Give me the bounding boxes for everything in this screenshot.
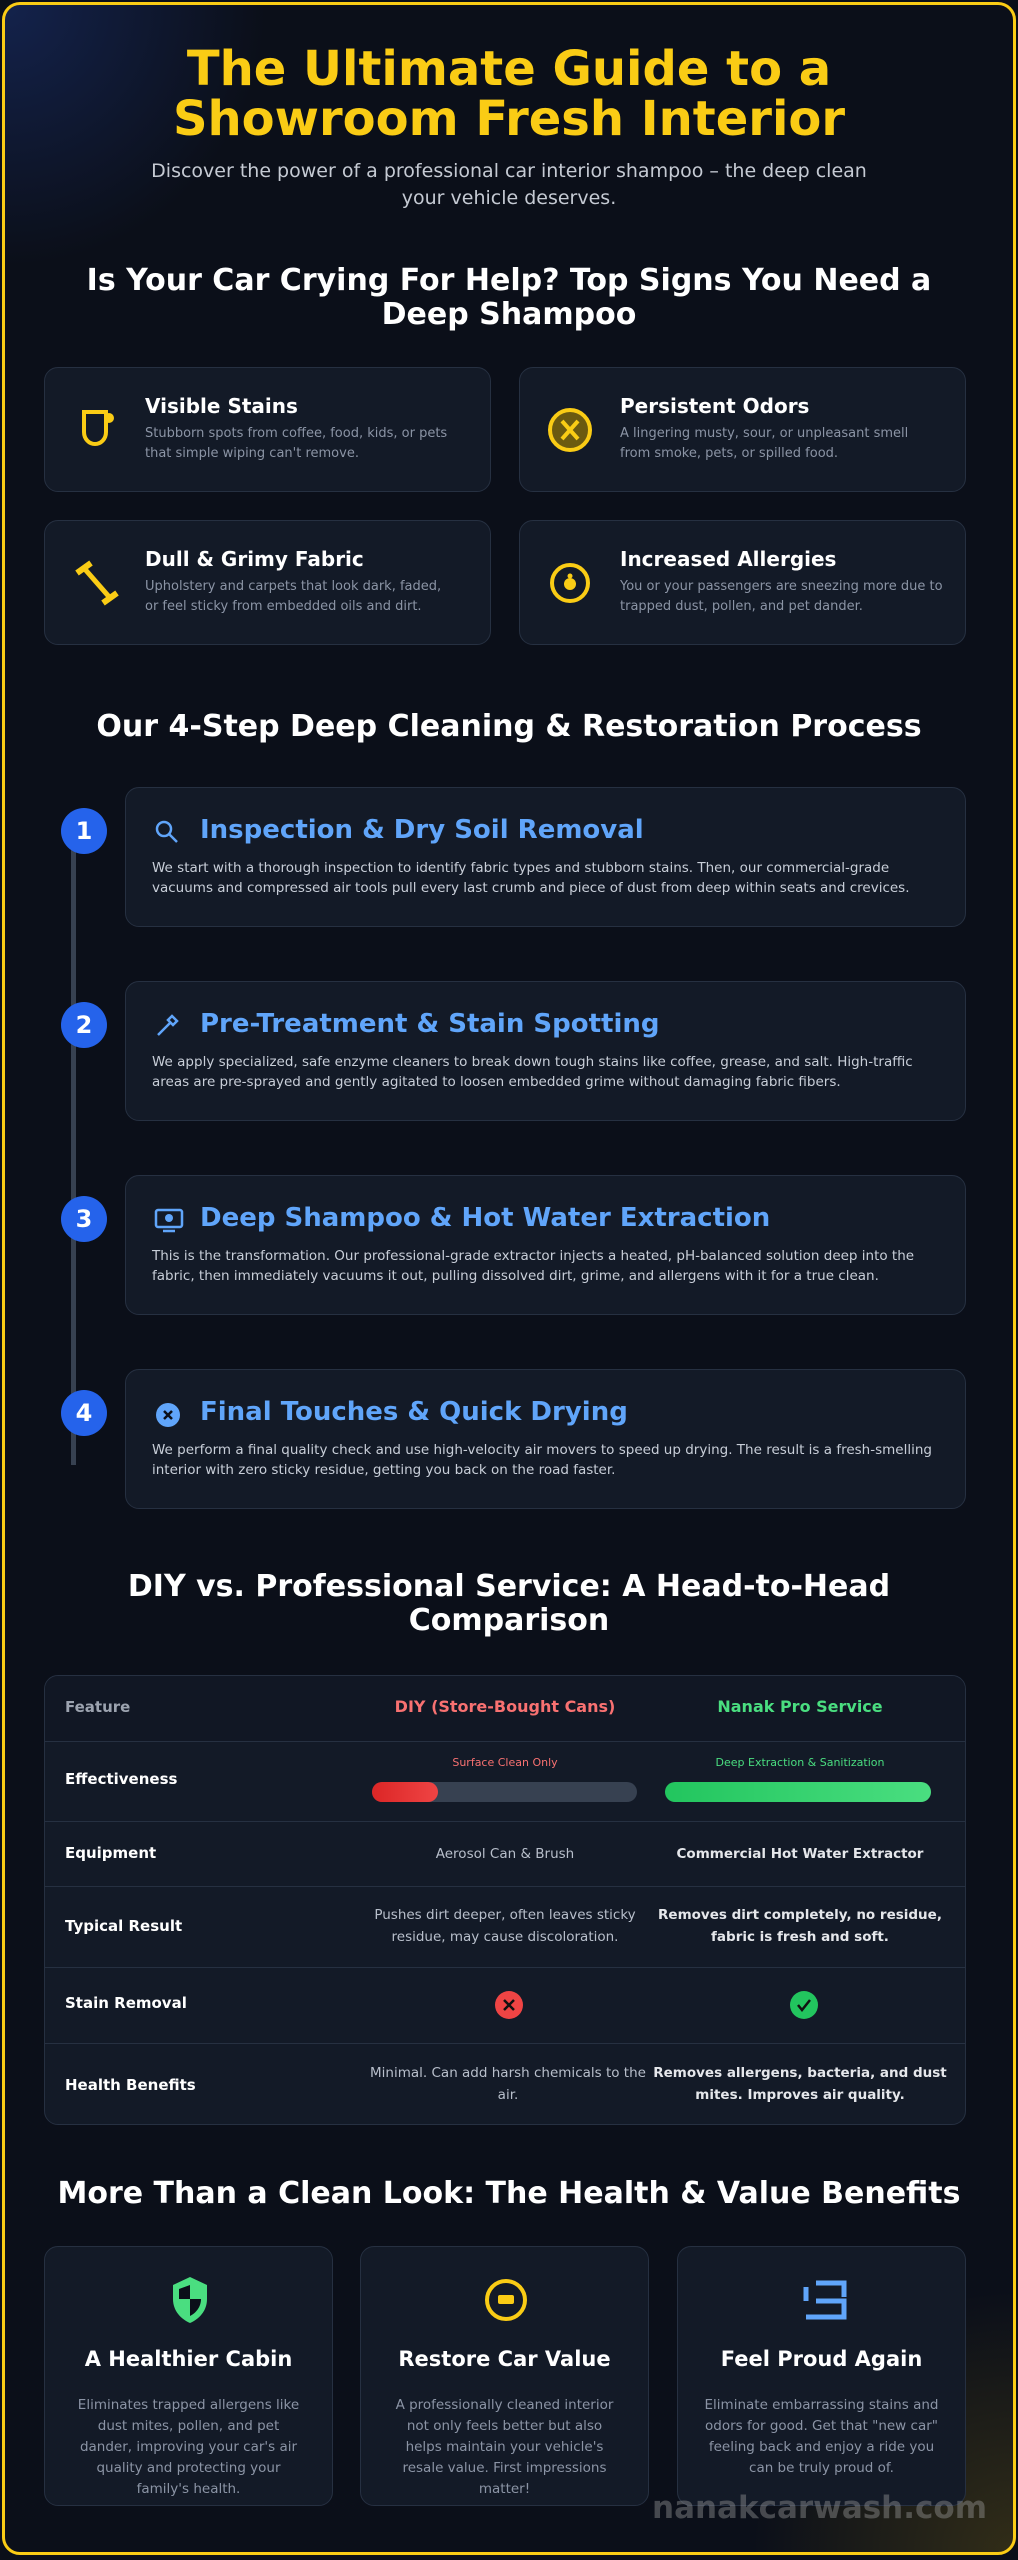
heading: comparison: DIY vs. Professional Service: A Head-to-Head Comparison [128, 1569, 890, 1638]
card: dull fabric [44, 520, 491, 645]
header row: Nanak Pro Service [717, 1697, 883, 1716]
step 4: We perform a final quality check and use high-velocity air movers to speed up drying. The result is a fresh-smelling interior with zero sticky residue, getting you back on the road faster. [152, 1442, 932, 1478]
row: effectiveness [45, 1741, 965, 1821]
row: health: Removes allergens, bacteria, and dust mites. Improves air quality. [653, 2065, 947, 2103]
number 3: 3 [76, 1205, 92, 1233]
watermark: nanakcarwash.com [652, 2490, 987, 2526]
header row: Feature [65, 1698, 130, 1716]
card: allergies: You or your passengers are sneezing more due to trapped dust, pollen, and pet dander. [620, 579, 943, 614]
step 2: We apply specialized, safe enzyme cleaners to break down tough stains like coffee, grease, and salt. High-traffic areas are pre-sprayed and gently agitated to loosen embedded grime without damaging fabric fibers. [152, 1054, 913, 1090]
icon: cup [82, 410, 114, 446]
benefit: car value: Restore Car Value [398, 2347, 611, 2371]
heading: benefits: More Than a Clean Look: The Health & Value Benefits [58, 2176, 960, 2211]
benefit: healthier cabin: A Healthier Cabin [85, 2347, 292, 2371]
step 3 [61, 1175, 966, 1315]
row: stain removal [45, 1967, 965, 2043]
card: odors [519, 367, 966, 492]
number 4 [61, 1390, 107, 1436]
card: visible stains [44, 367, 491, 492]
header row [45, 1676, 965, 1741]
comparison table [44, 1675, 966, 2125]
number 4: 4 [76, 1399, 92, 1427]
row: result: Removes dirt completely, no residue, fabric is fresh and soft. [658, 1907, 942, 1945]
benefit: proud: Feel Proud Again [721, 2347, 922, 2371]
icon: dumbbell [75, 560, 119, 606]
icon: shield [173, 2277, 207, 2323]
row: result: Typical Result [65, 1917, 182, 1935]
row: health: Minimal. Can add harsh chemicals to the air. [370, 2065, 646, 2103]
icon: blue shape [804, 2280, 846, 2320]
icon: x badge [156, 1403, 180, 1427]
icon: green check [790, 1991, 818, 2019]
row: health: Health Benefits [65, 2076, 196, 2094]
benefit: healthier cabin: Eliminates trapped allergens like dust mites, pollen, and pet dander, improving your car's air quality and protecting your family's health. [78, 2397, 299, 2497]
step 3: Deep Shampoo & Hot Water Extraction [200, 1203, 770, 1233]
icon: coin [485, 2279, 527, 2321]
header row: DIY (Store-Bought Cans) [395, 1697, 615, 1716]
number 3 [61, 1196, 107, 1242]
step 2 [61, 981, 966, 1121]
icon: dropper [157, 1014, 179, 1036]
card: odors: A lingering musty, sour, or unpleasant smell from smoke, pets, or spilled food. [620, 426, 908, 461]
step 4 [61, 1369, 966, 1509]
row: effectiveness: Effectiveness [65, 1770, 177, 1788]
card: allergies: Increased Allergies [620, 547, 836, 571]
row: result [45, 1886, 965, 1967]
title [173, 41, 845, 147]
row: stain removal: Stain Removal [65, 1994, 187, 2012]
step 4: Final Touches & Quick Drying [200, 1397, 628, 1427]
row: equipment: Commercial Hot Water Extractor [677, 1846, 923, 1862]
row: equipment [45, 1821, 965, 1886]
row: effectiveness: Surface Clean Only [452, 1756, 558, 1769]
icon: x circle [548, 408, 592, 452]
timeline line [71, 831, 76, 1465]
number 2: 2 [76, 1011, 92, 1039]
icon: allergy circle [550, 563, 590, 603]
icon: monitor [154, 1208, 184, 1232]
icon: magnifier [156, 820, 178, 843]
step 3: This is the transformation. Our professional-grade extractor injects a heated, pH-balanced solution deep into the fabric, then immediately vacuums it out, pulling dissolved dirt, grime, and allergens with it for a true clean. [152, 1248, 914, 1284]
benefit: car value [360, 2246, 649, 2506]
step 1: Inspection & Dry Soil Removal [200, 815, 644, 845]
step 1 [61, 787, 966, 927]
card: odors: Persistent Odors [620, 394, 809, 418]
subtitle: Discover the power of a professional car interior shampoo – the deep clean your vehicle deserves. [151, 160, 867, 209]
heading: process: Our 4-Step Deep Cleaning & Restoration Process [96, 709, 922, 744]
number 1 [61, 808, 107, 854]
row: effectiveness: Deep Extraction & Sanitization [716, 1756, 884, 1769]
benefit: car value: A professionally cleaned interior not only feels better but also helps maintain your vehicle's resale value. First impressions matter! [396, 2397, 613, 2497]
row: health [45, 2043, 965, 2126]
row: equipment: Equipment [65, 1844, 156, 1862]
card: visible stains: Stubborn spots from coffee, food, kids, or pets that simple wiping can't remove. [145, 426, 447, 461]
card: visible stains: Visible Stains [145, 394, 298, 418]
title: Showroom Fresh Interior [173, 91, 845, 147]
card: allergies [519, 520, 966, 645]
number 1: 1 [76, 817, 92, 845]
heading: signs: Is Your Car Crying For Help? Top Signs You Need a Deep Shampoo [87, 263, 931, 332]
benefit: proud [677, 2246, 966, 2506]
title: The Ultimate Guide to a [187, 41, 831, 97]
benefit: proud: Eliminate embarrassing stains and odors for good. Get that "new car" feeling back and enjoy a ride you can be truly proud of. [705, 2397, 938, 2476]
benefit: healthier cabin [44, 2246, 333, 2506]
step 2: Pre-Treatment & Stain Spotting [200, 1009, 660, 1039]
row: equipment: Aerosol Can & Brush [436, 1846, 574, 1862]
step 1: We start with a thorough inspection to identify fabric types and stubborn stains. Then, our commercial-grade vacuums and compressed air tools pull every last crumb and piece of dust from deep within seats and crevices. [152, 860, 910, 896]
row: result: Pushes dirt deeper, often leaves sticky residue, may cause discoloration. [374, 1907, 636, 1945]
number 2 [61, 1002, 107, 1048]
card: dull fabric: Dull & Grimy Fabric [145, 547, 364, 571]
icon: red x [495, 1991, 523, 2019]
card: dull fabric: Upholstery and carpets that look dark, faded, or feel sticky from embedded oils and dirt. [145, 579, 441, 614]
